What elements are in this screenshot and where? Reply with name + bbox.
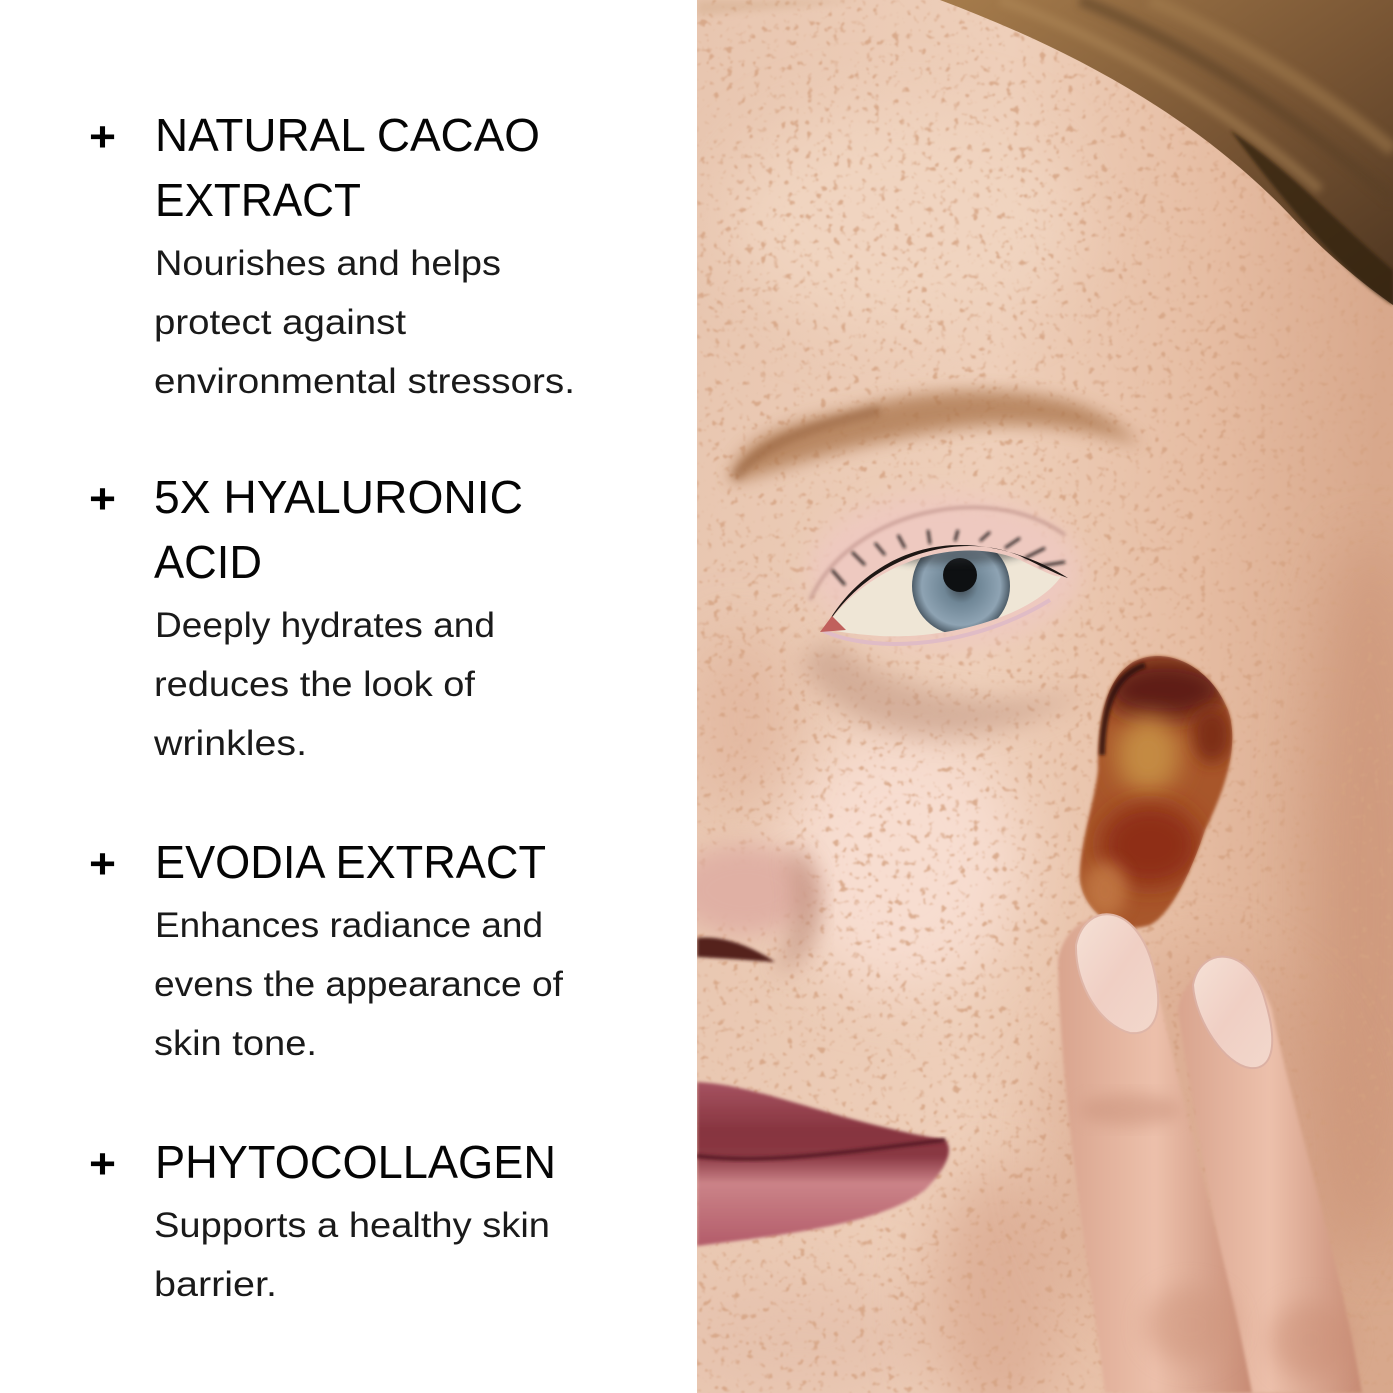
ingredient: evodia extract: Enhances radiance and bbox=[155, 906, 543, 945]
ingredient: 5x hyaluronic acid: reduces the look of bbox=[154, 665, 475, 704]
fingers bbox=[1040, 914, 1362, 1393]
ingredient: evodia extract bbox=[89, 836, 563, 1063]
eye socket shadow bbox=[800, 495, 1090, 737]
photo: face with product smear bbox=[660, 0, 1393, 1393]
ingredient: 5x hyaluronic acid: ACID bbox=[154, 536, 262, 588]
ingredient: natural cacao extract bbox=[89, 109, 575, 401]
hair bbox=[697, 0, 1393, 305]
finger: left bbox=[1058, 914, 1252, 1393]
ingredient: natural cacao extract: environmental stressors. bbox=[154, 362, 575, 401]
ingredient: 5x hyaluronic acid: 5X HYALURONIC bbox=[154, 471, 523, 523]
ingredient: 5x hyaluronic acid: Deeply hydrates and bbox=[155, 606, 495, 645]
product smear bbox=[1080, 656, 1232, 928]
skin base bbox=[660, 0, 1393, 1393]
ingredient: natural cacao extract: NATURAL CACAO bbox=[155, 109, 540, 161]
finger: right bbox=[1178, 957, 1362, 1393]
ingredient: 5x hyaluronic acid: wrinkles. bbox=[153, 724, 307, 763]
eye bbox=[810, 507, 1068, 644]
ingredient: evodia extract: skin tone. bbox=[154, 1024, 317, 1063]
ingredient: evodia extract: + bbox=[89, 840, 116, 887]
ingredient: phytocollagen bbox=[89, 1136, 556, 1304]
lips bbox=[697, 1082, 949, 1246]
ingredient: natural cacao extract: protect against bbox=[154, 303, 406, 342]
ingredient: natural cacao extract: + bbox=[89, 113, 116, 160]
ingredient: natural cacao extract: Nourishes and helps bbox=[155, 244, 501, 283]
nose bbox=[675, 845, 817, 975]
ingredient: phytocollagen: barrier. bbox=[154, 1265, 277, 1304]
ingredient: 5x hyaluronic acid: + bbox=[89, 475, 116, 522]
ingredient: 5x hyaluronic acid bbox=[89, 471, 523, 763]
freckles bbox=[697, 0, 1393, 1393]
ingredient: evodia extract: EVODIA EXTRACT bbox=[155, 836, 546, 888]
ingredient: natural cacao extract: EXTRACT bbox=[155, 174, 361, 226]
eyebrow bbox=[730, 391, 1140, 482]
ingredient: phytocollagen: + bbox=[89, 1140, 116, 1187]
ingredient: phytocollagen: Supports a healthy skin bbox=[154, 1206, 550, 1245]
ingredient list bbox=[89, 109, 575, 1304]
ingredient: evodia extract: evens the appearance of bbox=[154, 965, 563, 1004]
ingredient: phytocollagen: PHYTOCOLLAGEN bbox=[155, 1136, 556, 1188]
